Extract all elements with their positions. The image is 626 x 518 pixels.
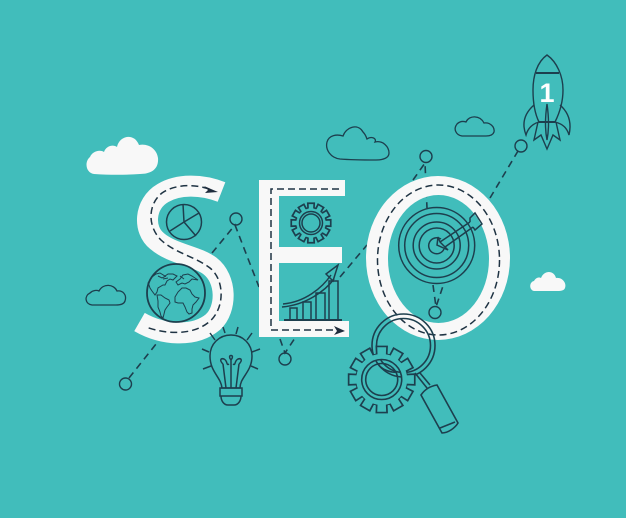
letter E — [259, 180, 349, 337]
letter O — [366, 176, 510, 340]
connector node: rocket — [515, 140, 527, 152]
icon: target with arrow — [399, 208, 482, 284]
letter S — [140, 186, 223, 333]
outline cloud right — [455, 117, 494, 136]
icon: bar chart with arrow — [282, 265, 342, 320]
magnifier and gear — [349, 314, 458, 433]
E arrowhead — [334, 326, 345, 335]
icon: small gear — [291, 203, 331, 243]
lens arc inside gear — [378, 364, 397, 372]
icon: globe — [147, 264, 205, 322]
outline cloud left — [86, 285, 126, 305]
icon: pie chart — [166, 204, 202, 240]
magnifier lens — [372, 314, 435, 377]
white cloud right — [530, 272, 565, 291]
white cloud left — [87, 137, 158, 175]
outline cloud middle — [327, 127, 389, 160]
connector node: target bottom — [429, 306, 441, 318]
S arrowhead — [204, 186, 218, 193]
connector node: O top — [420, 150, 432, 162]
rocket number: 1 — [539, 78, 555, 108]
S dashed path — [146, 186, 221, 332]
connector node: S bottom — [120, 378, 132, 390]
O dashed ring — [378, 185, 500, 335]
E dashed path — [271, 189, 339, 330]
dashed connector lines — [129, 151, 518, 378]
icon: light bulb — [202, 327, 260, 405]
icon: rocket — [524, 55, 570, 149]
large gear — [349, 346, 415, 413]
connector node: S top — [230, 213, 242, 225]
magnifier handle — [415, 373, 458, 433]
connector node: E bottom — [279, 353, 291, 365]
